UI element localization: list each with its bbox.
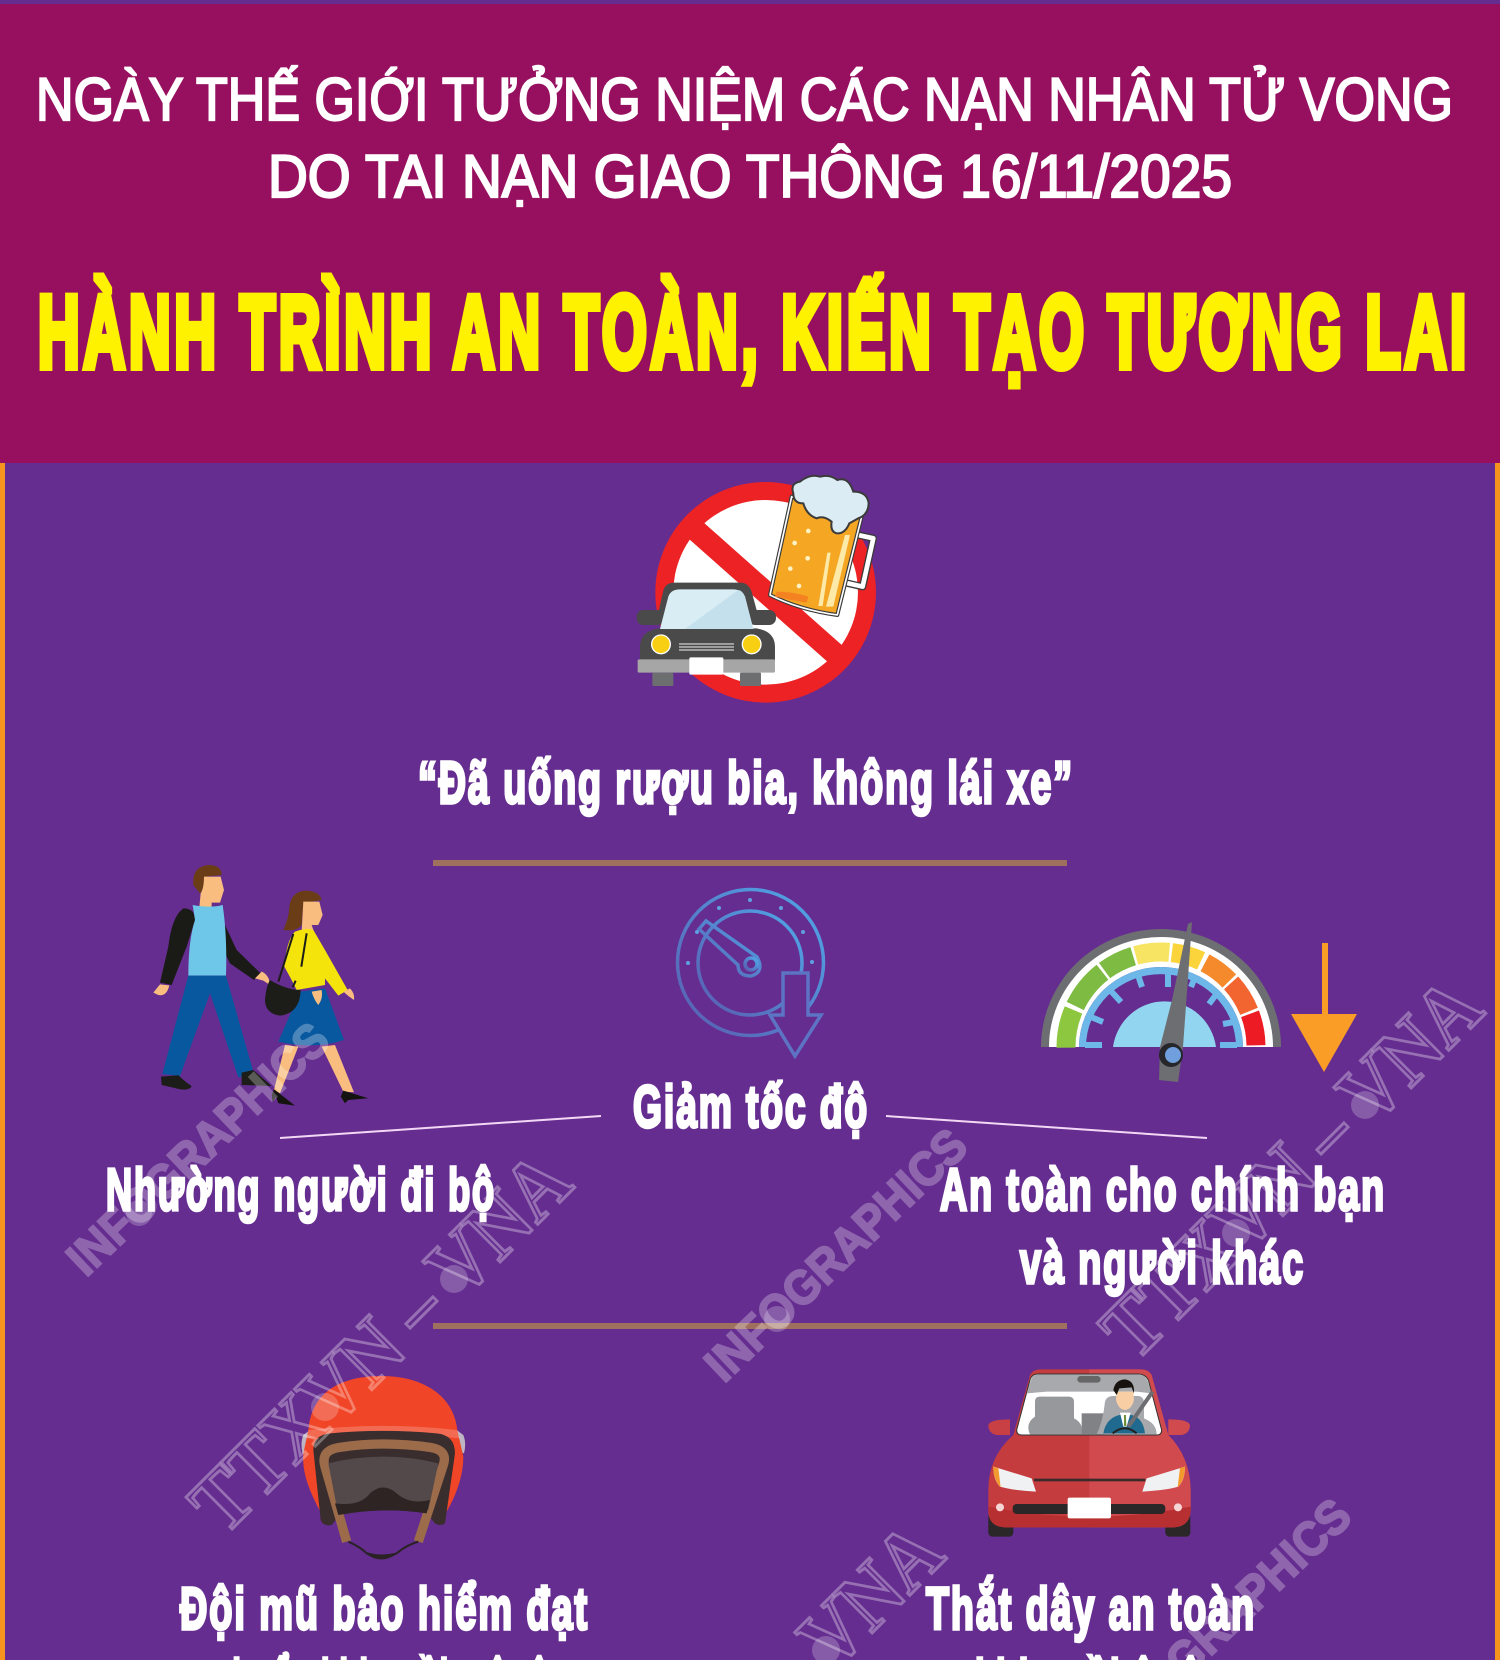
label: safety for you and others	[940, 1157, 1386, 1296]
watermark: TTXVN – VNA repeats: TTXVN – VNA	[172, 1134, 589, 1550]
icon: red car with driver	[988, 1369, 1191, 1537]
arrow: speed down	[1291, 943, 1357, 1072]
slogan: no driving after drinking: “Đã uống rượu bia, không lái xe”	[418, 750, 1074, 816]
label: wear a standard helmet: Đội mũ bảo hiểm đạt	[180, 1576, 589, 1642]
header banner	[0, 4, 1500, 463]
label: safety for you and others: và người khác	[1020, 1230, 1305, 1296]
icon: no drink and drive	[637, 476, 876, 703]
label: slow down: Giảm tốc độ	[633, 1074, 869, 1140]
label: fasten seat belt	[926, 1576, 1256, 1660]
icon: outline speed dial	[678, 890, 824, 1056]
label: fasten seat belt: Thắt dây an toàn	[926, 1576, 1256, 1642]
icon: helmet	[301, 1376, 465, 1558]
watermark: TTXVN – VNA repeats	[126, 960, 1500, 1660]
watermark: INFOGRAPHICS repeats	[57, 1013, 1362, 1660]
label: wear a standard helmet	[180, 1576, 589, 1660]
watermark: INFOGRAPHICS repeats: INFOGRAPHICS	[695, 1119, 978, 1392]
icon: pedestrians	[153, 865, 368, 1106]
subtitle line 2: DO TAI NẠN GIAO THÔNG 16/11/2025	[268, 143, 1232, 210]
watermark: INFOGRAPHICS repeats: INFOGRAPHICS	[57, 1013, 340, 1286]
icon: speedometer	[1027, 913, 1295, 1181]
label: yield to pedestrians: Nhường người đi bộ	[106, 1157, 496, 1223]
